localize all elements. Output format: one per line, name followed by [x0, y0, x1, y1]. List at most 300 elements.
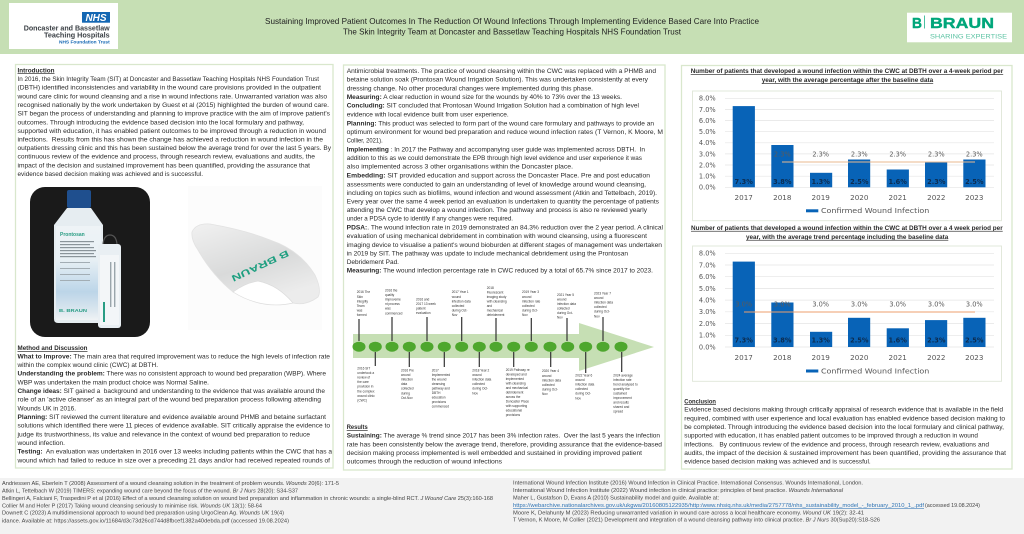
value labels: 3.8%: [773, 178, 792, 186]
method and discussion text: Testing: An evaluation was undertaken in 2016 over 13 weeks including patients within the CWC that has a: [18, 449, 332, 456]
conclusion text: supported with education, it has enabled patient outcomes to be improved through a reduction in wound: [684, 433, 978, 440]
NHS trust logo: NHS Foundation Trust: [59, 40, 110, 44]
method and discussion text: What to Improve: The main area that required improvement was to reduce the high levels of infection rate: [18, 353, 330, 360]
average line 2.3%: [782, 161, 975, 163]
bar chart 1: [692, 91, 1002, 221]
timeline labels: provision in: [357, 385, 374, 389]
method continued text: evaluation of using mechanical debridement in combination with wound cleansing, using a fluorescent: [347, 233, 647, 240]
timeline labels: pathway and: [432, 386, 450, 390]
method continued text: PDSA:. The wound infection rate in 2019 demonstrated an 84.3% reduction over the 2 year period. A clinical: [347, 224, 664, 231]
introduction text: In 2016, the Skin Integrity Team (SIT) at Doncaster and Bassetlaw Teaching Hospitals NHS Foundation Trust: [18, 76, 319, 83]
timeline labels: wound: [522, 295, 532, 299]
timeline labels: commenced: [385, 311, 403, 315]
NHS trust logo: NHS: [85, 13, 107, 24]
timeline arrow: [353, 323, 654, 371]
conclusion text: Conclusion: [684, 398, 716, 405]
chart 1 title: year, with the average percentage after the baseline data: [762, 77, 934, 84]
method and discussion text: wound infection.: [17, 440, 65, 447]
method continued text: addition to this as we could demonstrate the EPB through high level evidence and user experience it was: [347, 155, 643, 162]
timeline labels: Team: [357, 304, 365, 308]
timeline labels: 2024 average: [613, 374, 633, 378]
timeline labels: with cleansing: [506, 382, 526, 386]
timeline labels: spread: [613, 410, 623, 414]
average labels: 2.3%: [812, 151, 829, 159]
x axis labels: 2020: [850, 353, 869, 362]
value labels: 1.3%: [812, 337, 830, 345]
timeline labels: Nov: [522, 313, 528, 317]
references left column: Andriessen AE, Eberlein T (2008) Assessment of a wound cleansing solution in the treatment of problem wounds. Wounds 20(6): 171-5: [2, 481, 339, 487]
timeline labels: during Oct-: [452, 308, 467, 312]
timeline labels: [357, 286, 638, 417]
value labels: 2.3%: [927, 337, 946, 345]
timeline labels: 2019 Year 3: [522, 290, 539, 294]
value labels: 2.5%: [965, 337, 984, 345]
timeline labels: wound clinic: [357, 394, 375, 398]
method and discussion text: Change ideas: SIT gained a background and understanding to the evidence that was available around the: [18, 388, 325, 395]
title: [265, 16, 759, 36]
method continued text: Implementing : In 2017 the Pathway and accompanying user guide was implemented across DBTH. In: [347, 146, 645, 153]
x axis labels: 2017: [735, 353, 753, 362]
timeline labels: infection data: [557, 302, 576, 306]
timeline labels: improveme: [385, 298, 401, 302]
chart 2 title: year, with the average trend percentage including the baseline data: [746, 234, 949, 241]
timeline labels: Implemented: [432, 373, 450, 377]
timeline labels: collected: [594, 305, 607, 309]
panel: charts and conclusion: [682, 66, 1012, 469]
average labels: 3.0%: [889, 300, 906, 308]
references right column: T Vernon, K Moore, M Collier (2021) Development and integration of a wound cleansing pathway into clinical practice. Br J Nurs 30(Sup20):S18-S26: [513, 518, 880, 524]
method and discussion text: Planning: SIT reviewed the current literature and evidence available around PHMB and betaine surfactant: [18, 414, 326, 421]
x axis labels: [735, 193, 983, 202]
method continued text: Measuring: A clear reduction in wound size for the wounds by 40% to 73% over the 13 weeks.: [347, 94, 622, 101]
conclusion text: required, combined with user experience and local evaluation has enabled evidence based decision making to: [684, 415, 1005, 422]
x axis labels: 2023: [965, 193, 983, 202]
timeline labels: 2016 and: [416, 298, 430, 302]
timeline labels: collected: [522, 304, 535, 308]
timeline labels: infection rate: [613, 378, 632, 382]
x axis labels: 2021: [889, 193, 907, 202]
references right column: Maher L, Gustafson D, Evans A (2010) Sustainability model and guide. Available at:: [513, 495, 719, 501]
bar chart 2: [692, 246, 1002, 381]
method and discussion text: Wounds UK in 2016.: [18, 405, 76, 412]
method continued text: betaine solution soak (Prontosan Wound Irrigation Solution). This was undertaken consistently at every: [347, 77, 649, 84]
bars: [733, 262, 986, 347]
timeline labels: improvement: [613, 396, 632, 400]
x axis labels: 2023: [965, 353, 983, 362]
method and discussion text: Understanding the problem: There was no consistent approach to wound bed preparation (WBP). Where: [18, 371, 326, 378]
image: debridement pad: B BRAUN: [230, 248, 290, 283]
introduction text: (DBTH) identified inconsistencies and variability in the wound care provisions provided in the outpatient: [18, 85, 321, 92]
legend: Confirmed Wound Infection: [821, 368, 929, 376]
chart 2 title: [691, 225, 1003, 241]
value labels: 7.3%: [735, 178, 753, 186]
image: Prontosan bottles: Prontosan: [60, 232, 85, 238]
value labels: [735, 337, 984, 345]
chart 1 title: Number of patients that developed a wound infection within the CWC at DBTH over a 4-week period per: [691, 68, 1004, 75]
average labels: 3.0%: [851, 300, 868, 308]
value labels: 1.3%: [812, 178, 830, 186]
timeline labels: Doncaster Place: [506, 400, 529, 404]
timeline labels: Fluorescent: [487, 290, 503, 294]
timeline labels: Nov: [452, 313, 458, 317]
timeline labels: Nov: [557, 316, 563, 320]
timeline labels: nt process: [385, 302, 400, 306]
B. Braun logo: B: [912, 15, 922, 32]
timeline labels: debridement: [487, 313, 505, 317]
conclusion text: be completed. Through introducing the evidence based decision into the local formulary and clinical pathway,: [684, 424, 1004, 431]
x axis labels: 2018: [773, 353, 792, 362]
introduction text: impact of the decision and sustained improvement has been quantified, providing the assurance that: [18, 162, 310, 169]
introduction text: recognised nationally by the work undertaken by Guest et al (2015) highlighted the burden of wound care.: [18, 102, 329, 109]
timeline labels: during Oct-: [542, 387, 558, 391]
timeline labels: wound: [594, 296, 604, 300]
timeline labels: 2018: [487, 286, 494, 290]
results text: Sustaining: The average % trend since 2017 has been 3% infection rates. Over the last 5 years the infection: [347, 433, 660, 440]
timeline labels: DBTH: [432, 391, 441, 395]
timeline labels: Skin: [357, 295, 363, 299]
references left column: Atkin L, Tettelbach W (2019) TIMERS: expanding wound care beyond the focus of the wound. Br J Nurs 28(20): S34-S37: [2, 488, 298, 494]
conclusion text: infections. By continuous review of the evidence and process, through research review, evaluations and: [684, 441, 989, 448]
timeline labels: mechanical: [487, 309, 503, 313]
y axis labels: 1.0%: [699, 173, 716, 181]
method continued text: [347, 68, 664, 275]
timeline labels: wound: [401, 373, 411, 377]
references band: [0, 478, 1024, 534]
timeline labels: and mechanical: [506, 386, 528, 390]
method continued text: dressing change. No other procedural changes were implemented during this phase.: [347, 86, 593, 93]
timeline labels: educational: [506, 409, 522, 413]
bars: [733, 106, 986, 187]
timeline labels: infection data: [472, 378, 491, 382]
timeline labels: infection: [401, 378, 413, 382]
panel: introduction and method: [16, 64, 333, 468]
introduction text: outpatients dressing clinic and this has been sustained below the average trend for over the last 5 years. By: [18, 145, 332, 152]
timeline labels: collected: [452, 304, 465, 308]
timeline labels: Oct-Nov: [401, 396, 413, 400]
timeline labels: during: [401, 391, 410, 395]
y axis labels: 0.0%: [699, 184, 716, 192]
timeline labels: 2021 Year 5: [557, 293, 574, 297]
value labels: 2.5%: [965, 178, 984, 186]
average labels: 2.3%: [851, 151, 868, 159]
y axis labels: 8.0%: [699, 95, 716, 103]
timeline labels: developed and: [506, 373, 527, 377]
x axis labels: 2019: [812, 193, 830, 202]
NHS trust logo: Teaching Hospitals: [44, 30, 110, 40]
y axis labels: 7.0%: [699, 106, 716, 114]
introduction text: supported with education, it has enabled patient outcomes to be improved through a reduction in wound: [18, 128, 326, 135]
method and discussion text: role of an 'active cleanser' as an integral part of the wound bed preparation process following attending: [18, 397, 321, 404]
timeline labels: shared and: [613, 405, 629, 409]
timeline labels: data: [401, 382, 407, 386]
references left column: Downett C (2023) A multidimensional approach to wound bed preparation using UrgoClean Ag. Wounds UK 19(4): [2, 511, 284, 517]
value labels: 2.5%: [850, 178, 869, 186]
timeline labels: infection data: [542, 378, 561, 382]
method continued text: also implemented across 3 other organisations within the Doncaster place.: [347, 164, 573, 171]
method continued text: assessments were conducted to gain an understanding of level of knowledge around wound cleansing,: [347, 181, 646, 188]
timeline labels: collected: [575, 387, 588, 391]
timeline labels: provisions: [432, 400, 446, 404]
average labels: 2.3%: [966, 151, 983, 159]
timeline labels: imaging study: [487, 295, 507, 299]
method continued text: optimum environment for wound bed preparation and reduce wound infection rates (T Vernon, K Moore, M: [347, 129, 663, 136]
value labels: 1.6%: [889, 337, 907, 345]
method and discussion text: Method and Discussion: [18, 345, 88, 352]
references right column: International Wound Infection Institute (2022) Wound infection in clinical practice: principles of best practice. Wounds International: [513, 488, 844, 494]
timeline labels: Nov: [542, 392, 548, 396]
method continued text: Debridement Pad.: [347, 259, 399, 266]
timeline labels: across the: [506, 395, 521, 399]
timeline: [352, 286, 654, 417]
method continued text: evidence with local evidence built from user experience.: [347, 112, 509, 119]
method continued text: Every year over the same 4 week period an evaluation is undertaken to quantity the percentage of patients: [347, 198, 660, 205]
x axis labels: 2022: [927, 353, 945, 362]
y axis labels: 5.0%: [699, 128, 716, 136]
results text: outcomes through the reduction of wound infections: [347, 459, 503, 466]
results text: Results: [347, 424, 368, 431]
timeline labels: infection data: [594, 301, 613, 305]
conclusion text: [684, 398, 1006, 466]
timeline labels: the wound: [432, 378, 447, 382]
chart 1 title: [691, 68, 1004, 84]
panel: method continued, timeline and results: [344, 65, 665, 470]
timeline labels: provisions: [506, 413, 520, 417]
title: The Skin Integrity Team at Doncaster and Bassetlaw Teaching Hospitals NHS Foundation Trust: [343, 26, 682, 36]
results text: [347, 424, 662, 466]
x axis labels: 2017: [735, 193, 753, 202]
timeline labels: (CWC): [357, 398, 367, 402]
introduction text: [16, 67, 332, 178]
timeline labels: 2016 The: [357, 290, 370, 294]
image: Prontosan bottles: B. BRAUN: [59, 308, 87, 313]
header banner: [0, 0, 1024, 54]
B. Braun logo: SHARING EXPERTISE: [930, 34, 1008, 41]
y axis labels: 5.0%: [699, 285, 716, 293]
y axis labels: 8.0%: [699, 250, 716, 258]
y axis labels: [699, 95, 716, 192]
average labels: 3.0%: [928, 300, 945, 308]
value labels: 2.5%: [850, 337, 869, 345]
timeline labels: review of: [357, 376, 370, 380]
timeline stems: [359, 317, 622, 373]
method and discussion text: within the complex wound clinic (CWC) at DBTH.: [17, 362, 158, 369]
timeline labels: and: [487, 304, 492, 308]
timeline labels: and results: [613, 400, 629, 404]
timeline labels: quality: [385, 293, 395, 297]
average labels: [774, 151, 983, 159]
timeline labels: Integrity: [357, 299, 368, 303]
legend: Confirmed Wound Infection: [821, 207, 929, 215]
x axis labels: 2020: [850, 193, 869, 202]
value labels: 2.3%: [927, 178, 946, 186]
average labels: 3.0%: [774, 300, 791, 308]
average labels: 2.3%: [774, 151, 791, 159]
timeline labels: patient: [416, 307, 426, 311]
B. Braun logo: BRAUN: [930, 15, 994, 32]
average labels: 2.3%: [928, 151, 945, 159]
timeline labels: collected: [557, 307, 570, 311]
method continued text: Planning: This product was selected to form part of the wound care formulary and pathways to provide an: [347, 120, 654, 127]
y axis labels: 1.0%: [699, 332, 716, 340]
introduction text: infections. Results from this has shown the change has achieved a reduction in wound infection in the: [18, 136, 323, 143]
timeline labels: trend analysed to: [613, 382, 638, 386]
timeline labels: formed: [357, 313, 367, 317]
method and discussion text: judge its trustworthiness, its value and relevance in the context of wound bed preparation to reduce: [16, 431, 310, 438]
timeline labels: 2016 the: [385, 288, 398, 292]
timeline labels: 2018 Year 2: [472, 368, 490, 372]
timeline labels: infection rate: [522, 299, 540, 303]
timeline labels: during Oct-: [594, 310, 610, 314]
timeline labels: was: [385, 307, 391, 311]
method continued text: imaging device to visualise a patient's wound bioburden at different stages of management was undertaken: [347, 242, 662, 249]
average labels: 3.0%: [735, 300, 752, 308]
value labels: 3.8%: [773, 337, 792, 345]
references right column: Moore K, Delahunty M (2023) Reducing unwarranted variation in wound care across a local healthcare economy. Wound UK 19(2): 32-41: [513, 510, 864, 516]
y axis labels: [699, 250, 716, 351]
introduction text: wound care clinic for wound cleansing and a rise in wound infections rate. Unwarranted variation was also: [16, 93, 327, 100]
conclusion text: evidence based decision making was achieved and is successful.: [684, 459, 871, 466]
timeline labels: during Oct-: [522, 308, 538, 312]
timeline labels: 2017: [432, 368, 439, 372]
x axis labels: 2018: [773, 193, 792, 202]
timeline labels: commenced: [432, 404, 449, 408]
timeline labels: education: [432, 396, 446, 400]
timeline labels: 2019 Pathway re: [506, 368, 530, 372]
references left column: Bellingeri A, Falciani F, Traspedini P et al (2016) Effect of a wound cleansing solution on wound bed preparation and inflammation in chronic wounds: a single-blind RCT. J Wound Care 25(3):160-168: [2, 496, 493, 502]
timeline labels: wound: [542, 374, 552, 378]
image: debridement pad: [188, 186, 322, 330]
timeline labels: 2017 13 week: [416, 302, 436, 306]
timeline labels: Nov: [594, 314, 600, 318]
timeline labels: 2020 Year 4: [542, 369, 559, 373]
timeline labels: 2023 Year 7: [594, 292, 611, 296]
timeline labels: infection data: [575, 383, 594, 387]
timeline labels: evaluation: [416, 311, 431, 315]
image: Prontosan bottles: [30, 187, 150, 337]
timeline labels: infection data: [452, 299, 471, 303]
references left column: Collier M and Hofer P (2017) Taking wound cleansing seriously to minimise risk. Wounds UK 13(1): 58-64: [2, 503, 262, 509]
method and discussion text: [16, 345, 332, 464]
NHS trust logo: [9, 3, 118, 49]
timeline labels: Nov: [472, 391, 478, 395]
method continued text: in 2019 by SIT. The pathway was update to include mechanical debridement using the Prontosan: [347, 250, 628, 257]
x axis labels: 2022: [927, 193, 945, 202]
y axis labels: 2.0%: [699, 161, 716, 169]
timeline labels: collected: [472, 382, 485, 386]
timeline labels: cleansing: [432, 382, 445, 386]
introduction text: continuous review of the evidence and process, through research review, evaluations and audits, the: [18, 154, 315, 161]
introduction text: evidence based decision making was achieved and is successful.: [18, 171, 203, 178]
timeline labels: wound: [452, 295, 461, 299]
title: Sustaining Improved Patient Outcomes In The Reduction Of Wound Infections Through Implementing Evidence Based Care Into Practice: [265, 16, 759, 26]
timeline labels: Nov: [575, 396, 581, 400]
timeline labels: was: [357, 308, 363, 312]
y axis labels: 3.0%: [699, 150, 716, 158]
timeline labels: collected: [401, 387, 414, 391]
method continued text: under a PDSA cycle to identify if any changes were required.: [347, 216, 513, 223]
value labels: 7.3%: [735, 337, 753, 345]
timeline labels: collected: [542, 383, 555, 387]
timeline milestones: [352, 342, 628, 352]
value labels: 1.6%: [889, 178, 907, 186]
y axis labels: 4.0%: [699, 296, 716, 304]
timeline labels: wound: [472, 373, 482, 377]
references right column: International Wound Infection Institute (2016) Wound Infection in Clinical Practice. International Consensus. Wounds International, London.: [513, 480, 863, 486]
timeline labels: 2016 Pre: [401, 368, 414, 372]
method continued text: attending the CWC that develop a wound infection. The pathway and process is also re reviewed yearly: [347, 207, 648, 214]
chart 2 title: Number of patients that developed a wound infection within the CWC at DBTH over a 4 week period per: [691, 225, 1003, 232]
method continued text: including on topics such as biofilms, wound infection and wound assessment (Atkin and Tettelbach, 2019).: [347, 190, 657, 197]
timeline labels: undertook a: [357, 371, 374, 375]
references right column: (accessed 19.08.2024): [925, 503, 980, 509]
method and discussion text: wound which had failed to reduce in size over a preceding 21 days and/or had received repeated rounds of: [16, 457, 330, 464]
timeline labels: during Oct-: [472, 387, 488, 391]
timeline labels: wound: [557, 297, 567, 301]
introduction text: outcomes. Through introducing the evidence based decision into the local formulary and pathway,: [18, 119, 304, 126]
x axis labels: [735, 353, 983, 362]
method continued text: Collier, 2021).: [347, 138, 383, 145]
timeline labels: debridement: [506, 391, 524, 395]
timeline labels: implemented: [506, 377, 524, 381]
references left column: [2, 481, 493, 524]
average labels: [735, 300, 983, 308]
timeline labels: sustained: [613, 392, 627, 396]
y axis labels: 3.0%: [699, 308, 716, 316]
timeline labels: wound: [575, 378, 585, 382]
y axis labels: 7.0%: [699, 261, 716, 269]
x axis labels: 2019: [812, 353, 830, 362]
references right column: [513, 480, 980, 524]
value labels: [735, 178, 984, 186]
conclusion text: Evidence based decisions making through critically appraisal of research evidence that is available in the field: [684, 407, 1003, 414]
average labels: 3.0%: [812, 300, 829, 308]
conclusion text: audits, the impact of the decision & sustained improvement has been quantified, providing the assurance that: [684, 450, 1006, 457]
timeline labels: during Oct-: [575, 392, 591, 396]
method continued text: Measuring: The wound infection percentage rate in CWC reduced by a total of 65.7% since 2017 to 2023.: [347, 268, 653, 275]
average labels: 3.0%: [966, 300, 983, 308]
y axis labels: 6.0%: [699, 117, 716, 125]
timeline labels: with supporting: [506, 404, 527, 408]
y axis labels: 4.0%: [699, 139, 716, 147]
method and discussion text: solutions which identified there were 11 pieces of evidence available. SIT critically appraise the evidence to: [18, 423, 330, 430]
timeline labels: 2022 Year 6: [575, 374, 593, 378]
timeline labels: during Oct-: [557, 311, 573, 315]
references left column: idance. Available at: https://assets.gov.io/11684/d3c73d26cd744d8fbcef1382a40debda.pdf (accessed 19.08.2024): [2, 518, 289, 524]
introduction text: Introduction: [18, 67, 54, 74]
x axis labels: 2021: [889, 353, 907, 362]
results text: decision making process implemented is well embedded and sustained in providing improved patient: [347, 450, 642, 457]
timeline labels: 2016 SIT: [357, 366, 370, 370]
timeline labels: 2017 Year 1: [452, 290, 469, 294]
average line 3.0%: [744, 311, 975, 313]
y axis labels: 0.0%: [699, 343, 716, 351]
y axis labels: 2.0%: [699, 320, 716, 328]
NHS trust logo: Doncaster and Bassetlaw: [24, 24, 110, 32]
method continued text: Antimicrobial treatments. The practice of wound cleansing within the CWC was replaced with a PHMB and: [347, 68, 656, 75]
timeline labels: with cleansing: [487, 300, 507, 304]
method continued text: Concluding: SIT concluded that Prontosan Wound Irrigation Solution had a combination of high level: [347, 103, 640, 110]
y axis labels: 6.0%: [699, 273, 716, 281]
method continued text: Embedding: SIT provided education and support across the Doncaster Place. Pre and post education: [347, 173, 650, 180]
average labels: 2.3%: [889, 151, 906, 159]
timeline labels: the complex: [357, 389, 375, 393]
timeline labels: quantify the: [613, 387, 630, 391]
B. Braun logo: [907, 13, 1012, 42]
references right column: https://webarchive.nationalarchives.gov.uk/ukgwa/20160805122935/http:/www.nhsiq.nhs.uk/media/2757778/nhs_sustainability_model_-_february_2010_1_.pdf: [513, 503, 924, 509]
method and discussion text: WBP was undertaken the main product choice was Normal Saline.: [18, 379, 209, 386]
introduction text: SIT began the process of understanding and planning to improve practice with the aim of improve patient's: [18, 111, 331, 118]
timeline labels: the care: [357, 380, 369, 384]
